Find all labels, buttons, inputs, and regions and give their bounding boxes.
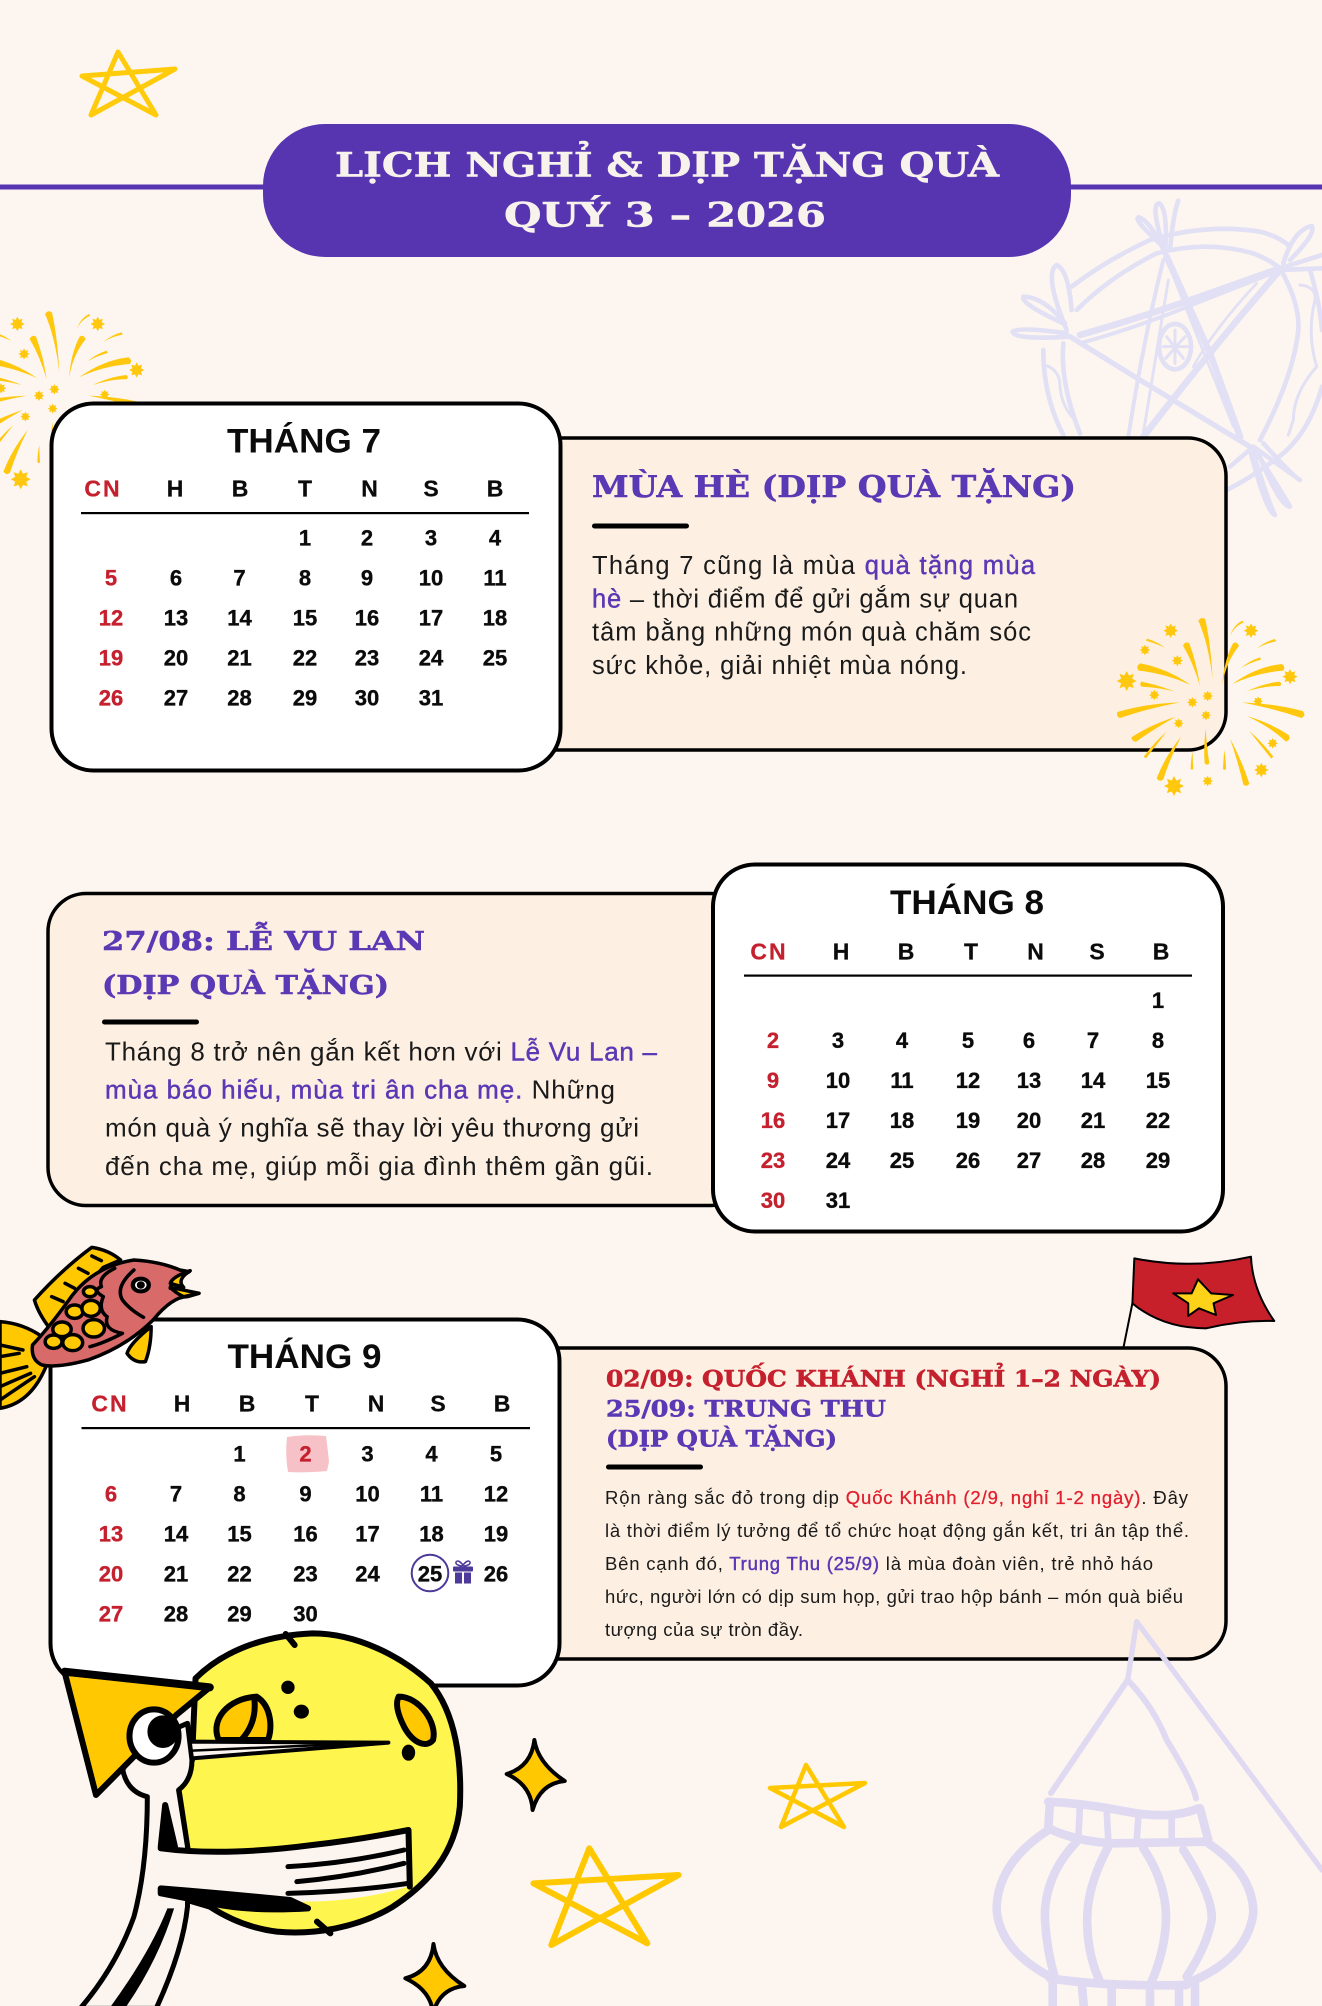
weekday header August: N <box>1027 938 1044 964</box>
date grid August: 1 <box>1152 988 1164 1013</box>
date grid July: 18 <box>483 606 507 630</box>
date grid September: 14 <box>164 1522 189 1546</box>
text block: August body <box>102 1020 658 1181</box>
icon: large hand-drawn star <box>533 1848 679 1945</box>
heading: Quốc Khánh and Trung Thu <box>606 1362 1161 1452</box>
weekday header August: B <box>898 938 914 964</box>
title banner <box>263 124 1071 257</box>
weekday header August <box>750 938 1169 964</box>
text block: July body: tâm bằng những món quà chăm sóc <box>592 618 1031 646</box>
date grid August: 16 <box>761 1108 785 1133</box>
date grid August: 17 <box>826 1108 850 1133</box>
icon: firework top-left <box>0 311 151 489</box>
text block: September body: tượng của sự tròn đầy. <box>605 1619 803 1640</box>
date grid August: 13 <box>1017 1068 1041 1093</box>
weekday header September: CN <box>91 1390 129 1416</box>
date grid July: 11 <box>483 566 507 590</box>
date grid July: 8 <box>299 566 311 590</box>
date grid September: 7 <box>170 1482 182 1506</box>
date grid September: 10 <box>355 1482 380 1506</box>
date grid August: 14 <box>1081 1068 1106 1093</box>
date grid August: 24 <box>826 1148 851 1173</box>
date grid August: 29 <box>1146 1148 1170 1173</box>
date grid July: 12 <box>99 606 123 630</box>
date grid July: 28 <box>227 686 252 710</box>
date grid September: 26 <box>484 1562 508 1586</box>
date grid August: 15 <box>1146 1068 1170 1093</box>
date grid August: 25 <box>890 1148 914 1173</box>
heading: Quốc Khánh and Trung Thu: 25/09: TRUNG THU <box>606 1396 886 1422</box>
date grid September: 30 <box>293 1602 318 1626</box>
weekday header July: N <box>361 476 378 502</box>
icon: Vietnamese flag <box>1124 1257 1274 1347</box>
icon: sparkle right of moon <box>507 1740 565 1810</box>
date grid September: 21 <box>164 1562 188 1586</box>
date grid September: 22 <box>227 1562 252 1586</box>
date grid September: 28 <box>164 1602 188 1626</box>
text block: September body: là thời điểm lý tưởng để tổ chức hoạt động gắn kết, tri ân tập thể. <box>605 1520 1189 1541</box>
heading: Lễ Vu Lan <box>102 921 425 1001</box>
date grid August: 2 <box>767 1028 779 1053</box>
panel: July summer gifts <box>500 438 1226 750</box>
weekday header August: CN <box>750 938 788 964</box>
date grid July: 24 <box>419 646 444 670</box>
date grid August <box>761 988 1170 1213</box>
icon: hanging lantern watermark <box>997 1622 1322 2006</box>
date grid July: 5 <box>105 566 117 590</box>
date grid September: 12 <box>484 1482 508 1506</box>
date grid September: 16 <box>293 1522 318 1546</box>
date grid September: 3 <box>361 1442 374 1466</box>
date grid August: 27 <box>1017 1148 1041 1173</box>
date grid July: 4 <box>489 526 502 550</box>
heading: Lễ Vu Lan: (DỊP QUÀ TẶNG) <box>102 968 389 1001</box>
weekday header September: B <box>239 1390 255 1416</box>
weekday header September: S <box>430 1390 446 1416</box>
calendar: September <box>50 1320 560 1686</box>
date grid July: 17 <box>419 606 443 630</box>
weekday header August: H <box>833 938 849 964</box>
date grid August: 10 <box>826 1068 850 1093</box>
crane eye <box>129 1709 179 1763</box>
weekday header July: S <box>423 476 439 502</box>
date grid August: 22 <box>1146 1108 1170 1133</box>
date grid July: 13 <box>164 606 188 630</box>
date grid September: 9 <box>299 1482 312 1506</box>
crane neck <box>80 1723 192 2006</box>
panel: August Vu Lan <box>48 894 748 1206</box>
crane wing head cap <box>65 1673 210 1795</box>
date grid September: 18 <box>419 1522 444 1546</box>
date grid July: 30 <box>355 686 379 710</box>
title banner: QUÝ 3 – 2026 <box>504 194 826 236</box>
date grid July: 26 <box>99 686 123 710</box>
date grid August: 7 <box>1087 1028 1099 1053</box>
date grid August: 31 <box>826 1188 850 1213</box>
highlight: national day <box>286 1435 329 1472</box>
date grid August: 9 <box>767 1068 779 1093</box>
date grid September: 1 <box>233 1442 246 1466</box>
date grid August: 3 <box>832 1028 844 1053</box>
weekday header July <box>84 476 503 502</box>
date grid July: 25 <box>483 646 507 670</box>
date grid September: 2 <box>299 1442 312 1466</box>
weekday header September <box>91 1390 510 1416</box>
date grid September: 17 <box>355 1522 380 1546</box>
text block: July body: sức khỏe, giải nhiệt mùa nóng. <box>592 652 967 680</box>
date grid July: 7 <box>233 566 246 590</box>
weekday header July: CN <box>84 476 122 502</box>
weekday header September: H <box>174 1390 190 1416</box>
date grid August: 12 <box>956 1068 980 1093</box>
icon: gift <box>453 1561 473 1584</box>
text block: September body: hức, người lớn có dịp sum họp, gửi trao hộp bánh – món quà biểu <box>605 1586 1183 1607</box>
date grid August: 20 <box>1017 1108 1041 1133</box>
date grid July: 15 <box>293 606 317 630</box>
weekday header July: B <box>487 476 503 502</box>
date grid August: 5 <box>962 1028 974 1053</box>
date grid July: 2 <box>361 526 373 550</box>
heading: Mùa hè: MÙA HÈ (DỊP QUÀ TẶNG) <box>592 468 1076 505</box>
date grid August: 4 <box>896 1028 909 1053</box>
icon: small hand-drawn star <box>770 1765 865 1827</box>
date grid July: 21 <box>227 646 252 670</box>
icon: sparkle below moon <box>405 1944 464 2006</box>
date grid July: 27 <box>164 686 188 710</box>
date grid September: 19 <box>484 1522 508 1546</box>
weekday header August: T <box>964 938 978 964</box>
date grid September: 20 <box>99 1562 123 1586</box>
heading: Quốc Khánh and Trung Thu: (DỊP QUÀ TẶNG) <box>606 1424 837 1452</box>
date grid August: 8 <box>1152 1028 1164 1053</box>
date grid September: 25 <box>418 1562 442 1586</box>
text block: August body: món quà ý nghĩa sẽ thay lời yêu thương gửi <box>105 1112 639 1142</box>
text block: August body: Tháng 8 trở nên gắn kết hơn với Lễ Vu Lan – <box>105 1036 658 1066</box>
date grid September: 8 <box>233 1482 246 1506</box>
text block: July body <box>592 524 1036 680</box>
crane beak <box>190 1742 388 1758</box>
weekday header July: H <box>167 476 183 502</box>
text block: July body: hè – thời điểm để gửi gắm sự quan <box>592 584 1018 614</box>
date grid September: 11 <box>420 1482 443 1506</box>
icon: star lantern watermark <box>1013 201 1322 515</box>
date grid July: 16 <box>355 606 379 630</box>
weekday header August: S <box>1089 938 1105 964</box>
date grid August: 30 <box>761 1188 785 1213</box>
date grid September: 4 <box>425 1442 438 1466</box>
date grid August: 6 <box>1023 1028 1035 1053</box>
date grid August: 23 <box>761 1148 785 1173</box>
calendar: July <box>52 404 560 770</box>
date grid July: 20 <box>164 646 188 670</box>
date grid September: 29 <box>227 1602 252 1626</box>
weekday header July: T <box>298 476 312 502</box>
date grid July: 3 <box>425 526 437 550</box>
heading: Quốc Khánh and Trung Thu: 02/09: QUỐC KHÁNH (NGHỈ 1–2 NGÀY) <box>606 1362 1161 1392</box>
icon: koi fish <box>0 1247 199 1408</box>
header rule <box>0 184 1322 190</box>
date grid July <box>99 526 507 710</box>
crane wing holding moon <box>158 1830 408 1904</box>
date grid September <box>99 1442 508 1626</box>
date grid September: 15 <box>227 1522 252 1546</box>
text block: August body: mùa báo hiếu, mùa tri ân cha mẹ. Những <box>105 1074 615 1104</box>
illustration: moon and crane <box>65 1633 460 2006</box>
weekday header September: B <box>494 1390 510 1416</box>
date grid July: 29 <box>293 686 317 710</box>
weekday header September: T <box>305 1390 319 1416</box>
date grid September: 23 <box>293 1562 318 1586</box>
text block: August body: đến cha mẹ, giúp mỗi gia đình thêm gần gũi. <box>105 1151 653 1181</box>
date grid July: 10 <box>419 566 443 590</box>
date grid August: 11 <box>890 1068 914 1093</box>
weekday header July: B <box>232 476 248 502</box>
date grid September: 13 <box>99 1522 123 1546</box>
date grid August: 18 <box>890 1108 914 1133</box>
icon: hand-drawn star top-left <box>82 52 175 115</box>
date grid September: 27 <box>99 1602 123 1626</box>
icon: firework on July panel <box>1117 618 1304 796</box>
text block: September body: Bên cạnh đó, Trung Thu (25/9) là mùa đoàn viên, trẻ nhỏ háo <box>605 1553 1153 1574</box>
text block: September body: Rộn ràng sắc đỏ trong dịp Quốc Khánh (2/9, nghỉ 1-2 ngày). Đây <box>605 1487 1189 1508</box>
date grid August: 19 <box>956 1108 980 1133</box>
calendar: August <box>713 864 1223 1232</box>
text block: September body <box>605 1464 1189 1640</box>
date grid September: 6 <box>105 1482 117 1506</box>
calendar title: Tháng 7: THÁNG 7 <box>227 420 381 460</box>
date grid July: 9 <box>361 566 373 590</box>
date grid July: 31 <box>419 686 443 710</box>
date grid July: 14 <box>227 606 252 630</box>
calendar title: Tháng 9: THÁNG 9 <box>228 1336 382 1376</box>
weekday header August: B <box>1153 938 1169 964</box>
heading: Lễ Vu Lan: 27/08: LỄ VU LAN <box>102 921 425 957</box>
calendar title: Tháng 8: THÁNG 8 <box>890 882 1044 922</box>
weekday header September: N <box>368 1390 384 1416</box>
title banner: LỊCH NGHỈ & DỊP TẶNG QUÀ <box>335 140 1000 186</box>
date grid September: 5 <box>490 1442 502 1466</box>
date grid July: 22 <box>293 646 317 670</box>
date grid August: 21 <box>1081 1108 1105 1133</box>
date grid July: 1 <box>299 526 311 550</box>
panel: September national day and mid-autumn <box>500 1348 1226 1659</box>
date grid August: 28 <box>1081 1148 1105 1173</box>
date grid July: 23 <box>355 646 379 670</box>
date grid August: 26 <box>956 1148 980 1173</box>
circle: mid-autumn date <box>412 1555 448 1591</box>
moon <box>179 1633 460 1932</box>
text block: July body: Tháng 7 cũng là mùa quà tặng mùa <box>592 552 1036 580</box>
date grid July: 6 <box>170 566 182 590</box>
date grid September: 24 <box>355 1562 380 1586</box>
date grid July: 19 <box>99 646 123 670</box>
